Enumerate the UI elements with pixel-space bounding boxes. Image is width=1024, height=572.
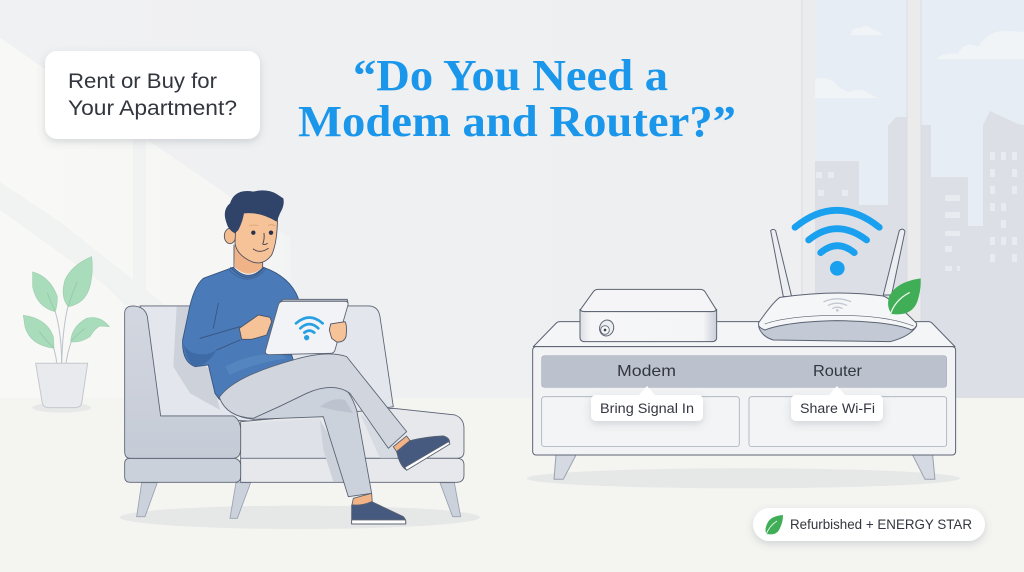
TV console with devices [527,210,960,488]
label: modem: Modem [617,363,676,380]
blue sweater [183,267,298,399]
bubble: share wi-fi [791,386,883,421]
title [298,51,736,146]
callout: rent or buy: Your Apartment? [68,97,237,120]
callout: rent or buy: Rent or Buy for [68,70,217,93]
modem [580,289,717,342]
console legs [554,455,935,479]
title: “Do You Need a [353,51,668,100]
tablet [265,299,348,355]
hand pointing [239,315,272,339]
sofa soft shadows [173,307,397,482]
bubble: share wi-fi: Share Wi-Fi [800,401,875,416]
icon: badge leaf [766,515,783,535]
badge: refurbished + energy star: Refurbished + ENERGY STAR [790,517,972,532]
left drawer [542,397,739,447]
background: wall [0,0,1024,398]
label band [542,356,947,387]
background: sunlight on wall [0,38,292,398]
icon: wifi on tablet [296,317,323,339]
window with city view [802,0,1024,398]
callout: rent or buy [45,51,260,139]
head and neck [224,190,284,274]
bubble: bring signal in [591,386,703,421]
sofa [125,306,464,518]
badge: refurbished + energy star [753,508,985,541]
right drawer [749,397,947,447]
title: Modem and Router?” [298,97,736,146]
floor shadow under sofa [120,506,480,529]
console body [533,322,956,455]
plant in pot [23,257,109,413]
bubble: bring signal in: Bring Signal In [600,401,694,416]
label: router: Router [813,363,863,380]
icon: green leaf [888,278,921,316]
router [758,229,917,342]
small wifi mark [824,299,851,311]
background: floor [0,398,1024,572]
crossed upper leg [219,354,450,470]
lower leg [219,385,406,524]
modem port [598,318,615,338]
man [183,190,450,524]
console floor shadow [527,468,960,488]
icon: large wifi signal [795,210,879,276]
sofa with seated man using tablet [120,190,480,529]
hand holding tablet [329,322,346,342]
